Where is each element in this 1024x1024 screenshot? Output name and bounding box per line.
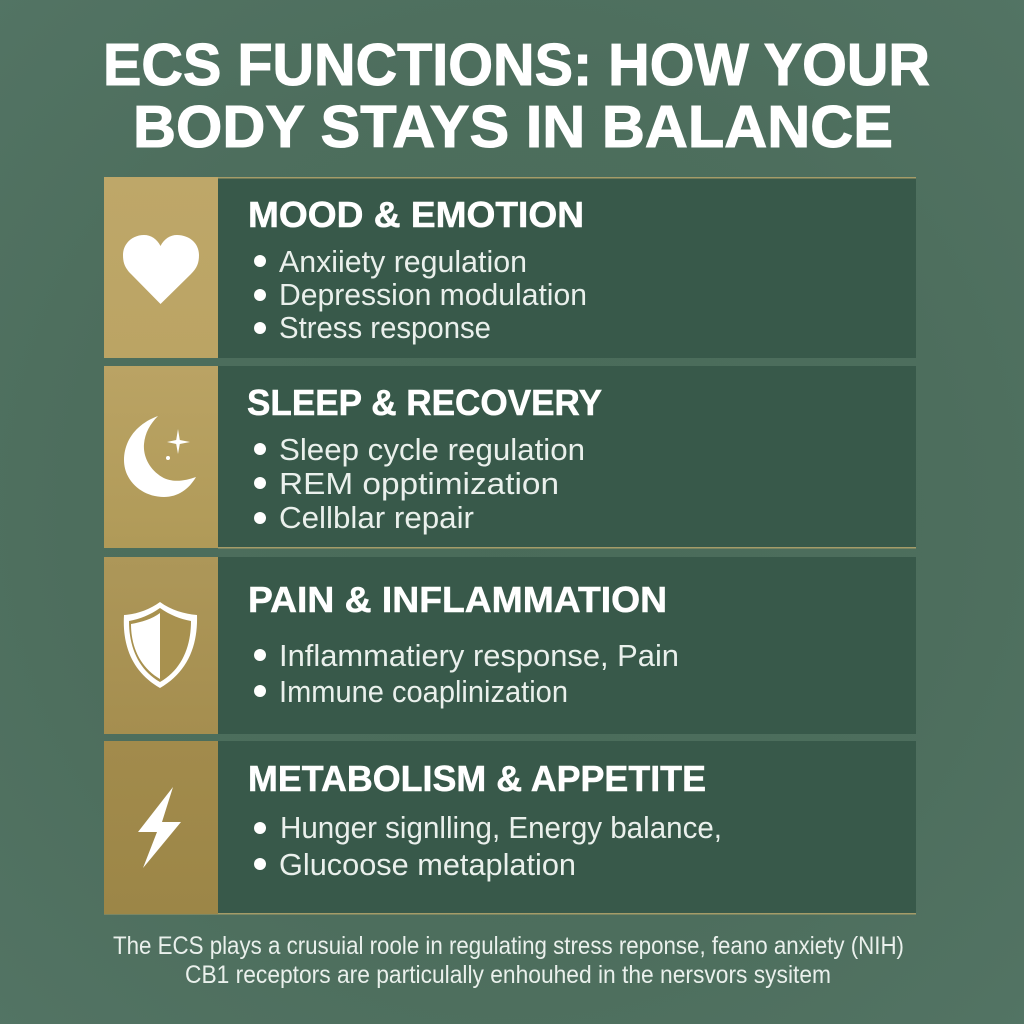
footer note: CB1 receptors are particulally enhouhed in the nersvors sysitem	[185, 961, 831, 989]
bullet list: metabolism and appetite	[254, 810, 722, 882]
panel: mood and emotion	[104, 177, 916, 358]
bullet list: mood and emotion: Depression modulation	[279, 277, 587, 312]
bullet list: mood and emotion	[254, 244, 587, 345]
icon: moon and star	[124, 416, 196, 497]
bullet list: metabolism and appetite: Hunger signlling, Energy balance,	[280, 810, 722, 845]
heading: pain and inflammation: PAIN & INFLAMMATION	[248, 579, 667, 620]
icon: heart	[123, 235, 199, 304]
bullet list: metabolism and appetite: Glucoose metaplation	[279, 847, 576, 882]
title	[103, 32, 930, 160]
bullet list: mood and emotion: Stress response	[279, 310, 491, 345]
heading: mood and emotion: MOOD & EMOTION	[248, 194, 584, 235]
icon: shield	[124, 602, 197, 688]
heading: sleep and recovery: SLEEP & RECOVERY	[247, 382, 602, 423]
bullet list: sleep and recovery: Sleep cycle regulation	[279, 432, 585, 467]
bullet list: pain and inflammation: Inflammatiery response, Pain	[279, 638, 679, 673]
panel: sleep and recovery	[104, 366, 916, 548]
icon: lightning bolt	[138, 787, 181, 868]
panel: pain and inflammation	[104, 557, 916, 734]
heading: metabolism and appetite: METABOLISM & APPETITE	[248, 758, 706, 799]
bullet list: mood and emotion: Anxiiety regulation	[279, 244, 527, 279]
title: BODY STAYS IN BALANCE	[133, 94, 893, 160]
bullet list: pain and inflammation: Immune coaplinization	[279, 674, 568, 709]
bullet list: sleep and recovery: REM opptimization	[279, 466, 559, 501]
footer note: The ECS plays a crusuial roole in regulating stress reponse, feano anxiety (NIH)	[113, 932, 904, 960]
panel: metabolism and appetite	[104, 741, 916, 914]
title: ECS FUNCTIONS: HOW YOUR	[103, 32, 930, 98]
bullet list: sleep and recovery	[254, 432, 585, 535]
footer note	[113, 932, 904, 989]
bullet list: sleep and recovery: Cellblar repair	[279, 500, 474, 535]
bullet list: pain and inflammation	[254, 638, 679, 709]
